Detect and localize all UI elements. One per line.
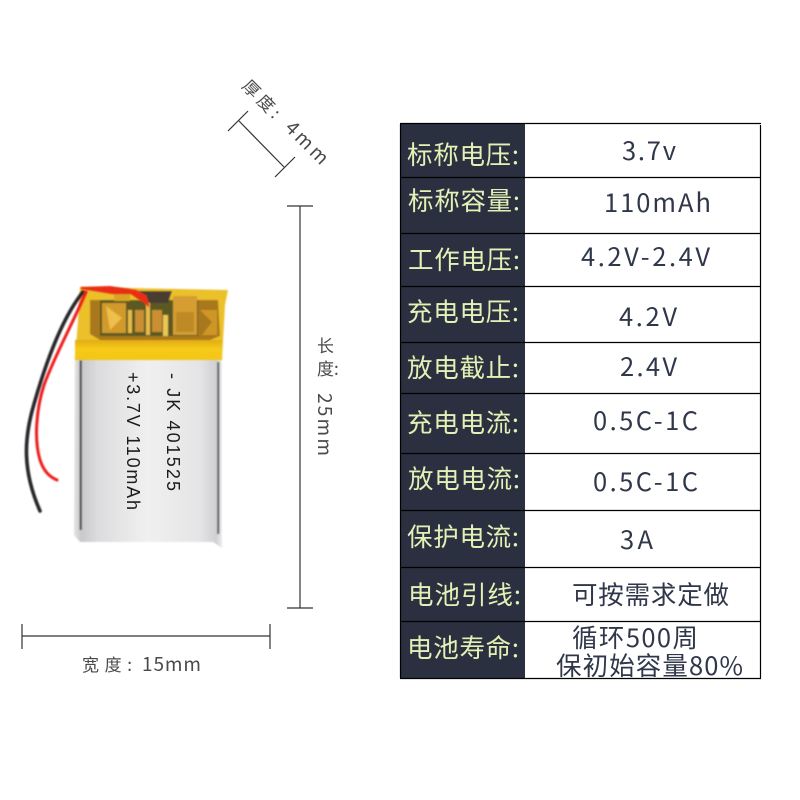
row: battery life: 电池寿命: bbox=[407, 628, 519, 665]
row: discharge current bbox=[408, 459, 698, 499]
row: charge current: 充电电流: bbox=[407, 403, 519, 440]
dimension: width 15mm: 宽度: bbox=[82, 651, 132, 676]
row: charge current: 0.5C-1C bbox=[593, 401, 698, 438]
row: working voltage: 4.2V-2.4V bbox=[581, 237, 710, 274]
row: discharge current: 放电电流: bbox=[408, 459, 520, 496]
dimension: length 25mm: 度: bbox=[317, 355, 339, 380]
row: protection current bbox=[407, 517, 653, 557]
row: nominal voltage: 3.7v bbox=[622, 131, 676, 168]
row: discharge current: 0.5C-1C bbox=[593, 462, 698, 499]
dimension: thickness 4mm: 厚度: bbox=[237, 73, 288, 123]
battery printed text: +3.7V 110mAh bbox=[123, 372, 143, 510]
battery photo illustration bbox=[26, 287, 228, 548]
dimension: thickness 4mm bbox=[228, 73, 336, 177]
row: charge voltage: 4.2V bbox=[619, 297, 677, 334]
row: working voltage bbox=[408, 237, 710, 277]
row: protection current: 保护电流: bbox=[407, 517, 519, 554]
specification table bbox=[400, 124, 761, 683]
dimension: thickness 4mm: 4mm bbox=[280, 114, 336, 170]
dimension: length 25mm: 25mm bbox=[312, 393, 339, 456]
dimension: width 15mm: 15mm bbox=[142, 650, 201, 677]
dimension: width 15mm bbox=[22, 624, 270, 677]
row: battery leads bbox=[408, 575, 729, 612]
table label column bbox=[400, 124, 525, 678]
row: charge voltage bbox=[407, 292, 677, 334]
row: battery life: 保初始容量80% bbox=[556, 646, 743, 683]
row: nominal capacity bbox=[408, 181, 711, 220]
row: battery leads: 可按需求定做 bbox=[572, 575, 729, 612]
battery silver body bbox=[74, 358, 222, 548]
row: protection current: 3A bbox=[620, 520, 653, 557]
dimension: length 25mm: 长 bbox=[317, 332, 334, 357]
row: battery leads: 电池引线: bbox=[408, 575, 521, 612]
row: nominal voltage: 标称电压: bbox=[407, 135, 519, 172]
row: working voltage: 工作电压: bbox=[408, 240, 520, 277]
row: nominal capacity: 标称容量: bbox=[408, 181, 520, 218]
battery yellow wrap and tabs bbox=[75, 287, 228, 360]
row: discharge cutoff: 放电截止: bbox=[407, 348, 519, 385]
row: battery life bbox=[407, 618, 743, 683]
battery wires bbox=[26, 287, 148, 511]
row: discharge cutoff bbox=[407, 347, 677, 385]
row: nominal voltage bbox=[407, 131, 676, 172]
row: charge voltage: 充电电压: bbox=[407, 292, 519, 329]
row: battery life: 循环500周 bbox=[572, 618, 698, 655]
dimension: length 25mm bbox=[287, 206, 339, 608]
row: charge current bbox=[407, 401, 698, 440]
battery photo illustration: - JK 401525 bbox=[163, 373, 183, 491]
row: discharge cutoff: 2.4V bbox=[620, 347, 677, 384]
table grid lines bbox=[400, 124, 761, 678]
row: nominal capacity: 110mAh bbox=[604, 183, 711, 220]
